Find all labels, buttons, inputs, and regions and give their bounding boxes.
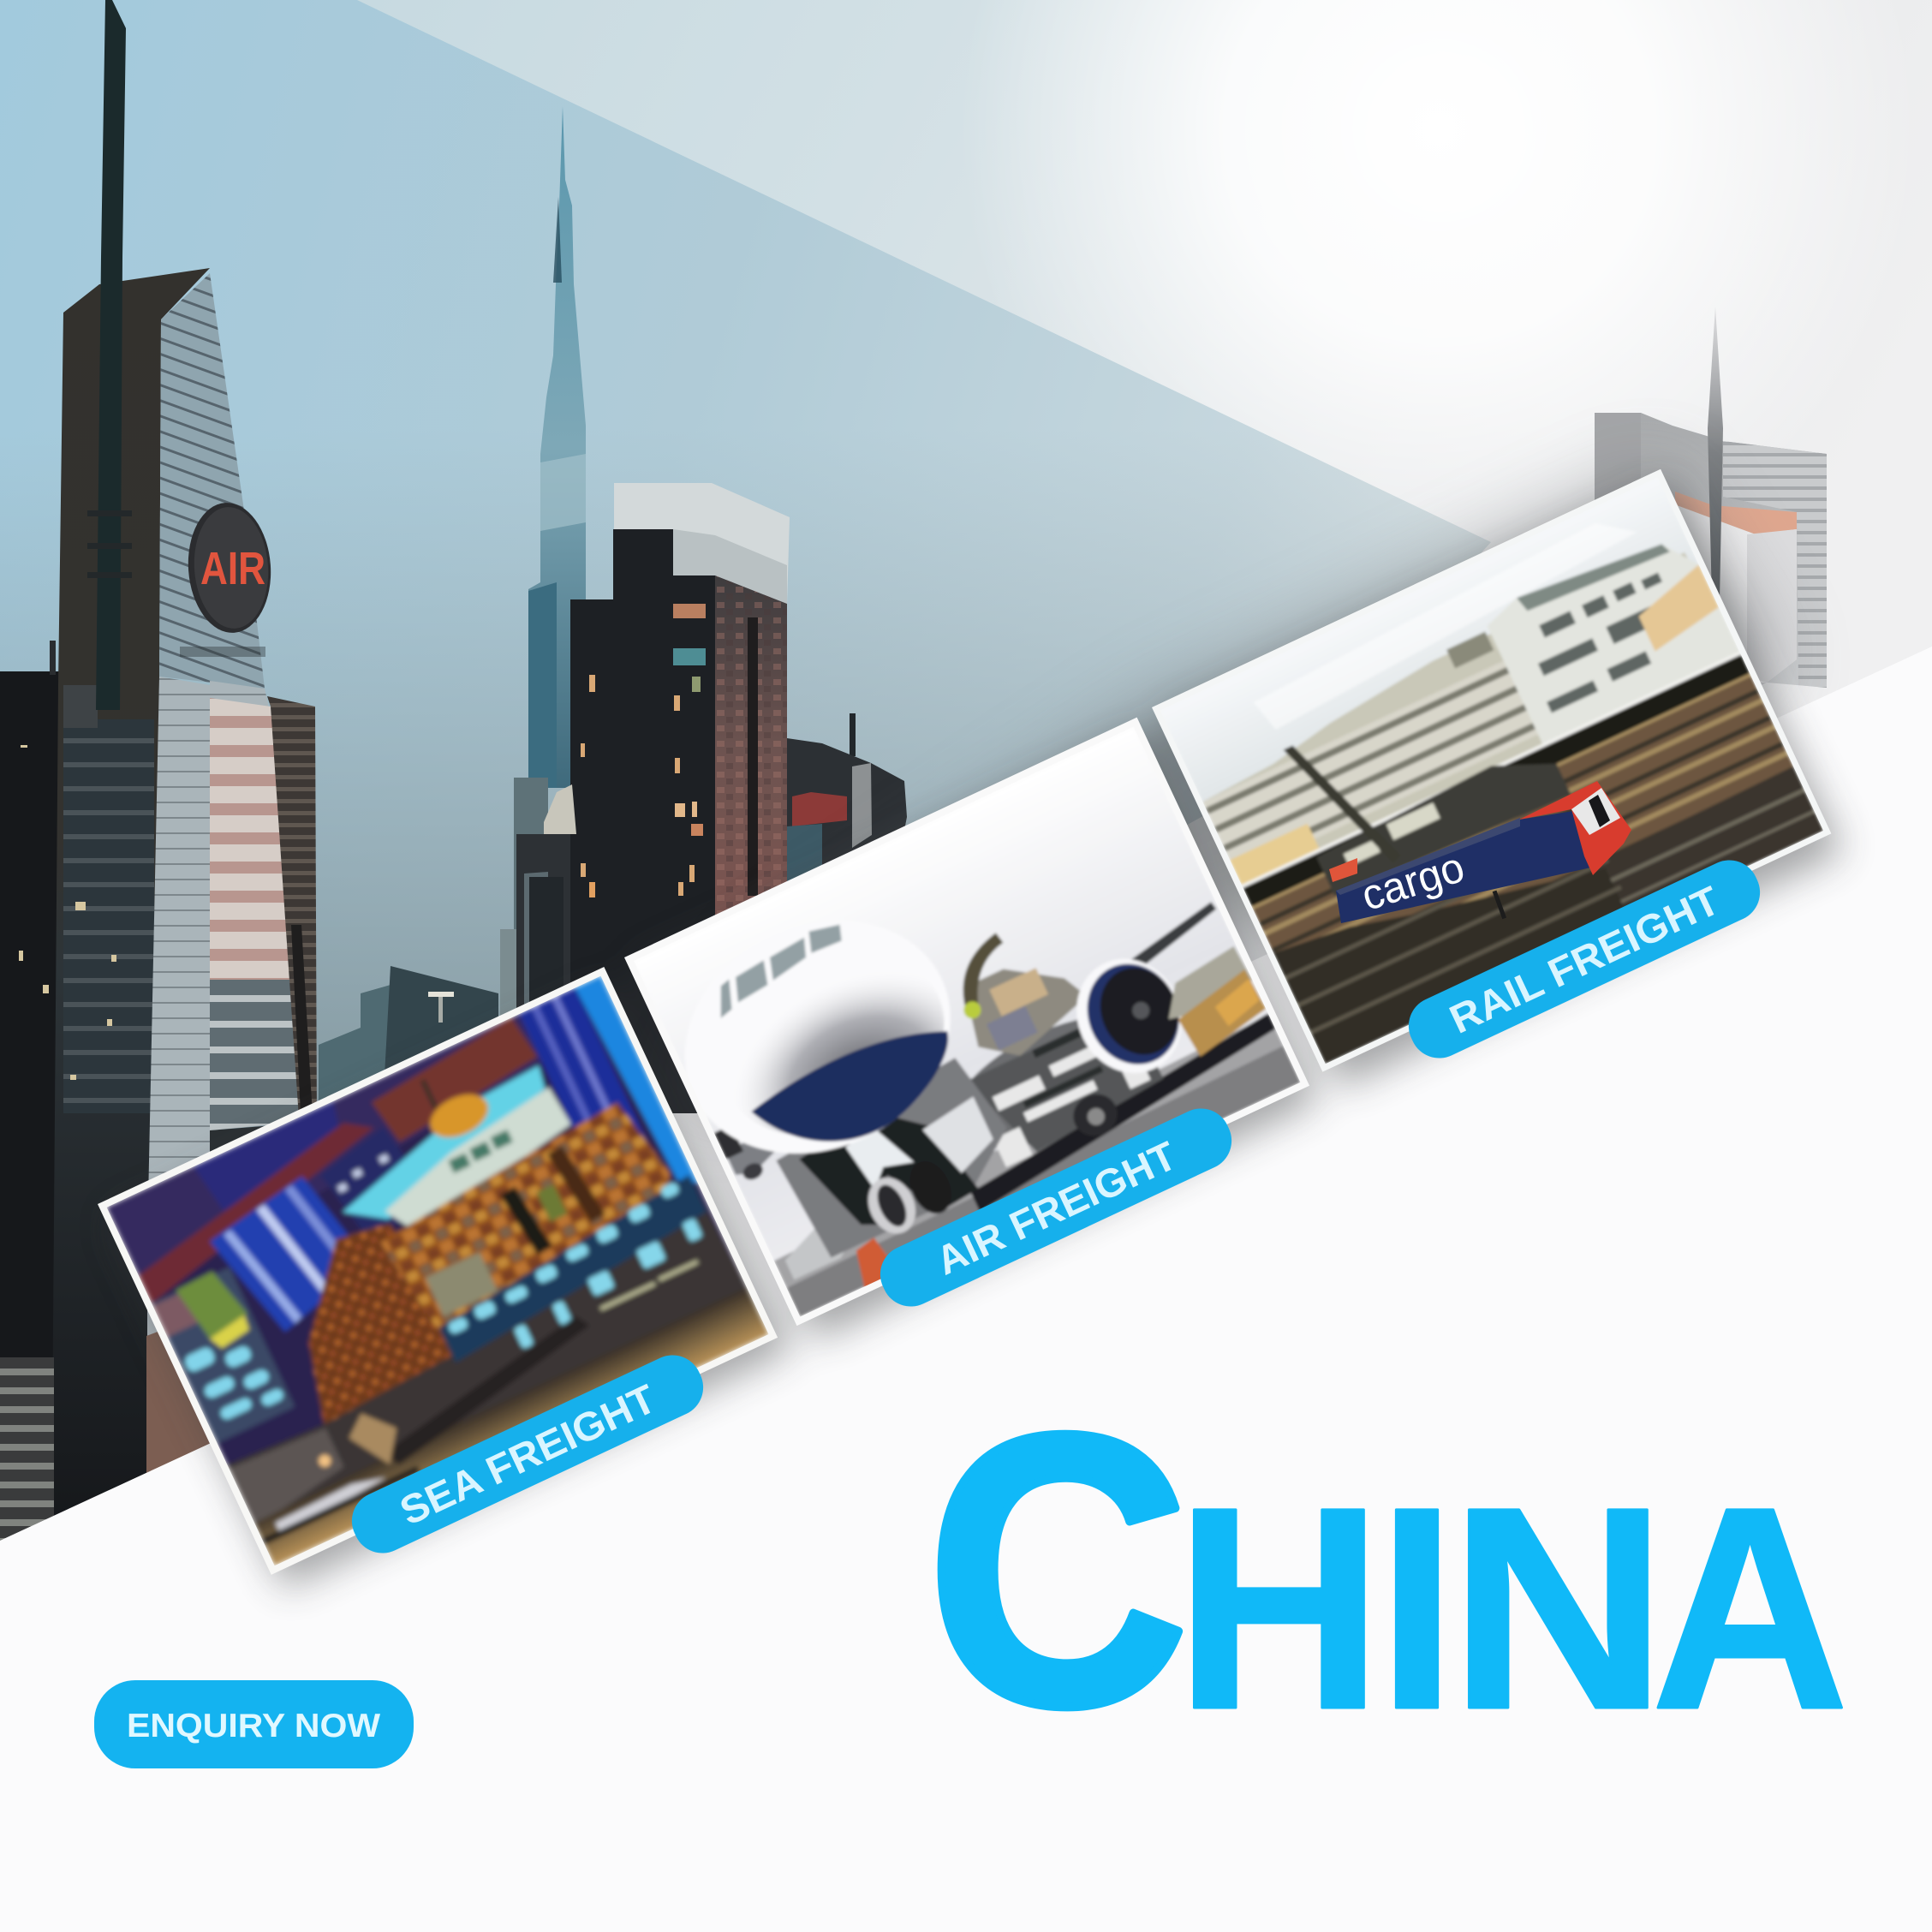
title: China: N — [1449, 1448, 1667, 1769]
small building with dome — [516, 784, 576, 1031]
icon: cargo locomotive — [1329, 781, 1631, 923]
title: China: A — [1651, 1448, 1849, 1769]
grey haze behind the cards — [685, 469, 1781, 1113]
label pill: air freight: AIR FREIGHT — [929, 1132, 1184, 1284]
panel: sky wedge — [0, 0, 1491, 1541]
panel: rail freight photo — [1152, 469, 1831, 1072]
building with white roof — [570, 483, 790, 1113]
label pill: rail freight — [1399, 850, 1769, 1068]
label pill: rail freight: RAIL FREIGHT — [1443, 877, 1726, 1042]
title: China — [927, 1356, 1849, 1786]
panel: distant faded tower, right — [1595, 307, 1827, 711]
round building with antenna — [787, 713, 907, 881]
soft shadow under lower edge of photos — [111, 484, 1843, 1589]
AIR sign — [188, 503, 271, 633]
panel: sea freight photo — [98, 967, 778, 1575]
main tower — [0, 0, 317, 1541]
title: China: I — [1377, 1448, 1457, 1769]
button: enquiry now — [94, 1680, 414, 1768]
panel: city skyline — [0, 0, 907, 1541]
background buildings — [319, 929, 516, 1100]
panel: white lower area — [0, 647, 1932, 1932]
cargo lettering: cargo — [1356, 843, 1470, 920]
label pill: sea freight: SEA FREIGHT — [393, 1375, 663, 1534]
label pill: air freight — [871, 1099, 1241, 1316]
AIR sign: AIR — [200, 543, 265, 594]
button: enquiry now: ENQUIRY NOW — [127, 1708, 380, 1744]
panel: air freight photo — [624, 718, 1309, 1326]
label pill: sea freight — [343, 1345, 713, 1563]
panel: upper light background with sun glow — [357, 0, 1932, 961]
title: China: H — [1175, 1448, 1383, 1769]
title: China: C — [927, 1356, 1189, 1786]
tower: far skyscraper — [514, 106, 586, 1000]
